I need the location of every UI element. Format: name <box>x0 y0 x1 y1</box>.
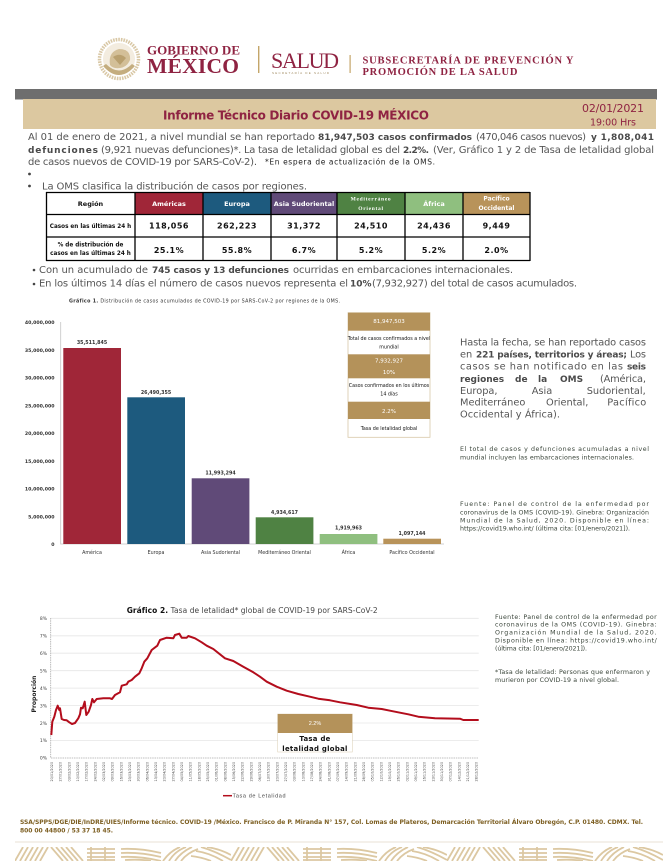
text block: countries and regions: 221 países, territorios y áreas; <box>476 350 627 360</box>
x axis dates: 10/02/2020 <box>76 762 80 782</box>
table rows: 6.7% <box>292 246 316 255</box>
bullets: vessels and 14 days: (7,932,927) del total de casos acumulados. <box>372 278 577 290</box>
table rows: Casos en las últimas 24 h <box>50 223 131 230</box>
bullets: vessels and 14 days: 745 casos y 13 defunciones <box>152 266 289 276</box>
x axis dates: 30/11/2020 <box>440 762 444 782</box>
intro paragraph <box>28 132 654 168</box>
category labels: Mediterráneo Oriental <box>258 549 311 556</box>
bars <box>63 348 441 544</box>
table rows: 9,449 <box>483 222 510 230</box>
x axis dates: 24/08/2020 <box>319 762 323 782</box>
summary box: 14 días <box>380 390 398 397</box>
table header: Oriental <box>358 206 384 212</box>
table: cases by region <box>46 192 530 261</box>
text block: countries and regions: (América, <box>600 373 646 385</box>
text block: countries and regions: Mediterráneo <box>460 396 525 408</box>
table rows: 5.2% <box>422 246 446 255</box>
x axis dates: 21/09/2020 <box>353 762 357 782</box>
intro paragraph: defunciones <box>28 146 98 156</box>
source note 1: coronavirus de la OMS (COVID-19). Ginebra: Organización <box>460 508 649 516</box>
logo: Gobierno de México: GOBIERNO DE <box>147 42 240 58</box>
summary box: mundial <box>379 344 399 350</box>
x axis dates: 03/08/2020 <box>293 762 297 782</box>
x axis dates: 06/07/2020 <box>258 762 262 782</box>
x axis dates: 08/06/2020 <box>223 762 227 782</box>
x axis dates: 01/06/2020 <box>215 762 219 782</box>
source note 1: Mundial de la Salud, 2020. Disponible en línea: <box>460 516 649 524</box>
table rows: 262,223 <box>217 222 257 230</box>
note: vessels included: El total de casos y defunciones acumuladas a nivel <box>460 446 649 453</box>
note: vessels included: mundial incluyen las embarcaciones internacionales. <box>460 454 634 462</box>
text block: countries and regions: seis <box>627 362 646 372</box>
x axis dates: 15/06/2020 <box>232 762 236 782</box>
x axis dates: 13/04/2020 <box>154 762 158 782</box>
table rows: 31,372 <box>287 222 321 230</box>
intro paragraph: de casos nuevos de COVID-19 por SARS-CoV-2). <box>28 157 257 168</box>
y axis labels: 40,000,000 <box>25 320 55 326</box>
intro paragraph: (9,921 nuevas defunciones)*. La tasa de letalidad global es del <box>101 145 400 156</box>
value labels: 26,490,355 <box>141 390 171 396</box>
source note 2: Organización Mundial de la Salud, 2020. <box>495 628 657 636</box>
text block: countries and regions: Sudoriental, <box>587 386 646 397</box>
value labels: 35,511,845 <box>77 340 107 346</box>
table rows: 25.1% <box>154 246 184 255</box>
table header: Mediterráneo <box>351 196 391 202</box>
x axis dates: 12/10/2020 <box>379 762 383 782</box>
x axis dates: 11/05/2020 <box>189 762 193 782</box>
text block: countries and regions: Pacífico <box>607 396 646 408</box>
table rows: 5.2% <box>359 246 383 255</box>
value labels <box>77 340 426 537</box>
text block: countries and regions: de <box>515 375 528 385</box>
y axis labels: 2% <box>40 721 48 727</box>
summary box: 10% <box>383 370 395 376</box>
heading: Informe Técnico Diario COVID-19 MÉXICO <box>163 108 429 122</box>
logo: Gobierno de México: MÉXICO <box>147 54 239 78</box>
callout: fatality rate: letalidad global <box>282 745 348 753</box>
source note 1: Fuente: Panel de control de la enfermedad por <box>460 501 649 508</box>
summary box: Tasa de letalidad global <box>360 426 417 432</box>
note: fatality definition: *Tasa de letalidad: Personas que enfermaron y <box>495 669 650 676</box>
logo: Salud: SECRETARÍA DE SALUD <box>272 71 330 75</box>
y axis labels: 5% <box>40 668 48 674</box>
y axis labels: 15,000,000 <box>25 459 55 465</box>
summary box: 7,932,927 <box>375 358 403 364</box>
table rows: % de distribución de <box>58 242 124 248</box>
logo: Salud: SALUD <box>271 48 339 73</box>
category labels: Asia Sudoriental <box>201 550 240 556</box>
source note 2: Disponible en línea: https://covid19.who.int/ <box>495 636 658 644</box>
icon: national emblem <box>100 40 138 78</box>
y axis labels: 5,000,000 <box>28 514 55 520</box>
footer text: 800 00 44800 / 53 37 18 45. <box>20 828 113 834</box>
x axis dates: 02/11/2020 <box>405 762 409 782</box>
source note 2 <box>495 614 658 652</box>
x axis dates: 29/06/2020 <box>249 762 253 782</box>
line chart: global fatality rate <box>31 616 479 800</box>
x axis dates: 23/11/2020 <box>431 762 435 782</box>
x axis dates: 10/08/2020 <box>301 762 305 782</box>
y axis labels: 7% <box>40 634 48 640</box>
text block: countries and regions <box>460 338 646 420</box>
y axis labels: 0 <box>51 542 55 548</box>
source note 2: coronavirus de la OMS (COVID-19). Ginebra: <box>495 622 657 628</box>
chart 2 title: Gráfico 2. Tasa de letalidad* global de COVID-19 por SARS-CoV-2 <box>127 606 378 615</box>
summary box <box>347 313 430 437</box>
x axis dates: 14/12/2020 <box>457 762 461 782</box>
source note 1 <box>460 501 649 532</box>
y axis labels: 4% <box>40 686 48 692</box>
summary box: Total de casos confirmados a nivel <box>347 336 430 342</box>
value labels: 11,993,294 <box>205 470 236 476</box>
source note 2: (última cita: [01/enero/2021]). <box>495 644 587 652</box>
text block: countries and regions: en <box>460 350 472 360</box>
table rows <box>50 222 510 257</box>
date and time <box>582 102 644 128</box>
value labels: 1,919,963 <box>335 526 362 532</box>
x axis dates: 03/02/2020 <box>67 762 71 782</box>
header logos <box>100 40 574 78</box>
bullets: vessels and 14 days: 10% <box>350 280 372 290</box>
x axis dates: 09/11/2020 <box>414 762 418 782</box>
footer pattern <box>15 847 663 861</box>
category labels: Pacífico Occidental <box>389 549 435 556</box>
logo: Subsecretaría: PROMOCIÓN DE LA SALUD <box>362 66 518 78</box>
intro paragraph: *En espera de actualización de la OMS. <box>265 158 435 166</box>
x axis dates: 27/07/2020 <box>284 762 288 782</box>
table rows: 2.0% <box>484 246 509 255</box>
category labels: América <box>82 549 102 556</box>
table header: Asia Sudoriental <box>274 200 334 208</box>
callout: fatality rate: Tasa de <box>299 735 331 743</box>
table header: Pacífico <box>483 196 510 202</box>
bullets: vessels and 14 days: ocurridas en embarcaciones internacionales. <box>293 265 513 276</box>
x axis dates: 07/12/2020 <box>449 762 453 782</box>
intro paragraph: Al 01 de enero de 2021, a nivel mundial se han reportado <box>28 132 315 143</box>
source note 2: Fuente: Panel de control de la enfermedad por <box>495 614 657 621</box>
x axis dates: 30/03/2020 <box>137 762 141 782</box>
value labels: 4,934,617 <box>271 510 298 516</box>
table rows: casos en las últimas 24 h <box>50 250 131 257</box>
x axis dates: 14/09/2020 <box>345 762 349 782</box>
table header: Occidental <box>479 205 514 212</box>
x axis dates: 20/07/2020 <box>275 762 279 782</box>
x axis dates: 25/05/2020 <box>206 762 210 782</box>
footer text <box>20 819 643 834</box>
text block: countries and regions: Europa, <box>460 386 498 397</box>
bullet list: regions intro: La OMS clasifica la distribución de casos por regiones. <box>42 180 307 192</box>
x axis dates: 28/09/2020 <box>362 762 366 782</box>
summary box: Casos confirmados en los últimos <box>349 382 430 389</box>
intro paragraph: 2.2%. <box>403 146 429 156</box>
category labels: Europa <box>148 550 164 556</box>
intro paragraph: (470,046 casos nuevos) <box>476 132 586 143</box>
x axis dates: 16/11/2020 <box>423 762 427 782</box>
table header: Europa <box>224 200 250 208</box>
intro paragraph: y 1,808,041 <box>591 133 654 143</box>
title banner <box>23 99 656 129</box>
y axis labels: 3% <box>40 703 48 709</box>
text block: countries and regions: Los <box>630 350 646 360</box>
x axis dates <box>50 762 479 782</box>
x axis dates: 31/08/2020 <box>327 762 331 782</box>
table header: África <box>423 199 445 208</box>
category labels: África <box>342 549 355 556</box>
intro paragraph: 81,947,503 casos confirmados <box>318 133 472 143</box>
y axis title: Proporción <box>31 676 38 712</box>
x axis dates: 16/03/2020 <box>119 762 123 782</box>
text block: countries and regions: la <box>538 375 547 385</box>
table rows: 24,510 <box>354 222 388 230</box>
x axis dates: 19/10/2020 <box>388 762 392 782</box>
x axis dates: 09/03/2020 <box>111 762 115 782</box>
category labels <box>82 549 435 556</box>
y axis labels: 8% <box>40 616 48 622</box>
text block: countries and regions: regiones <box>460 375 504 385</box>
x axis dates: 07/09/2020 <box>336 762 340 782</box>
logo: Subsecretaría <box>362 54 574 78</box>
callout: fatality rate <box>278 714 352 753</box>
table header: Américas <box>152 200 186 208</box>
x axis dates: 21/12/2020 <box>466 762 470 782</box>
x axis dates: 22/06/2020 <box>241 762 245 782</box>
note: fatality definition: murieron por COVID-19 a nivel global. <box>495 677 619 684</box>
x axis dates: 18/05/2020 <box>197 762 201 782</box>
y axis labels: 6% <box>40 651 48 657</box>
x axis dates: 26/10/2020 <box>397 762 401 782</box>
x axis dates: 24/02/2020 <box>93 762 97 782</box>
x axis dates: 13/07/2020 <box>267 762 271 782</box>
y axis labels: 30,000,000 <box>25 376 55 382</box>
table rows: 24,436 <box>417 222 451 230</box>
table rows: 118,056 <box>149 222 189 230</box>
text block: countries and regions: Oriental, <box>546 398 588 408</box>
y axis labels: 0% <box>40 756 48 762</box>
x axis dates: 04/05/2020 <box>180 762 184 782</box>
data line <box>51 634 479 735</box>
date and time: 19:00 Hrs <box>590 118 636 128</box>
y axis labels: 35,000,000 <box>25 348 55 354</box>
text block: countries and regions: Occidental y África). <box>460 408 560 420</box>
logo: Subsecretaría: SUBSECRETARÍA DE PREVENCIÓN Y <box>362 54 574 66</box>
y axis labels <box>25 320 55 548</box>
intro paragraph: (Ver, Gráfico 1 y 2 de Tasa de letalidad global <box>433 144 654 156</box>
x axis dates: 05/10/2020 <box>371 762 375 782</box>
x axis dates: 27/04/2020 <box>171 762 175 782</box>
y axis labels: 20,000,000 <box>25 431 55 437</box>
note: vessels included <box>460 446 649 462</box>
chart 1 caption: Gráfico 1. Distribución de casos acumulados de COVID-19 por SARS-CoV-2 por regiones de la OMS. <box>69 298 340 304</box>
x axis dates: 20/01/2020 <box>50 762 54 782</box>
x axis dates: 06/04/2020 <box>145 762 149 782</box>
text block: countries and regions: Asia <box>532 386 552 397</box>
x axis dates: 23/03/2020 <box>128 762 132 782</box>
text block: countries and regions: OMS <box>560 375 583 385</box>
source note 1: https://covid19.who.int/ (última cita: [01/enero/2021]). <box>460 524 630 532</box>
text block: countries and regions: Hasta la fecha, se han reportado casos <box>460 338 646 348</box>
bar chart: cumulative cases <box>25 320 444 556</box>
callout: fatality rate: 2.2% <box>309 721 321 727</box>
gray header bar <box>15 89 657 100</box>
table header <box>78 192 530 214</box>
x axis dates: 02/03/2020 <box>102 762 106 782</box>
text block: countries and regions: casos se han notificado en las <box>460 362 623 372</box>
value labels: 1,097,144 <box>398 531 426 537</box>
bullets: vessels and 14 days <box>33 265 577 290</box>
note: fatality definition <box>495 669 650 684</box>
logo: Gobierno de México <box>147 42 240 78</box>
y axis labels: 25,000,000 <box>25 403 55 409</box>
y axis labels <box>40 616 48 762</box>
x axis dates: 28/12/2020 <box>475 762 479 782</box>
x axis dates: 20/04/2020 <box>163 762 167 782</box>
summary box: 81,947,503 <box>373 319 405 325</box>
footer text: SSA/SPPS/DGE/DIE/InDRE/UIES/Informe técnico. COVID-19 /México. Francisco de P. Miranda N° 157, Col. Lomas de Plateros, Demarcación Territorial Álvaro Obregón, C.P. 01480. CDMX. Tel. <box>20 819 643 826</box>
bullets: vessels and 14 days: Con un acumulado de <box>39 265 148 276</box>
bullets: vessels and 14 days: En los últimos 14 días el número de casos nuevos representa el <box>39 278 348 290</box>
table rows: 55.8% <box>222 246 252 255</box>
x axis dates: 27/01/2020 <box>59 762 63 782</box>
x axis dates: 17/02/2020 <box>85 762 89 782</box>
y axis labels: 10,000,000 <box>25 486 55 492</box>
date and time: 02/01/2021 <box>582 102 644 115</box>
y axis labels: 1% <box>40 738 48 744</box>
x axis dates: 17/08/2020 <box>310 762 314 782</box>
summary box: 2.2% <box>382 409 396 415</box>
legend: Tasa de Letalidad <box>232 794 286 800</box>
table header: Región <box>78 200 104 208</box>
